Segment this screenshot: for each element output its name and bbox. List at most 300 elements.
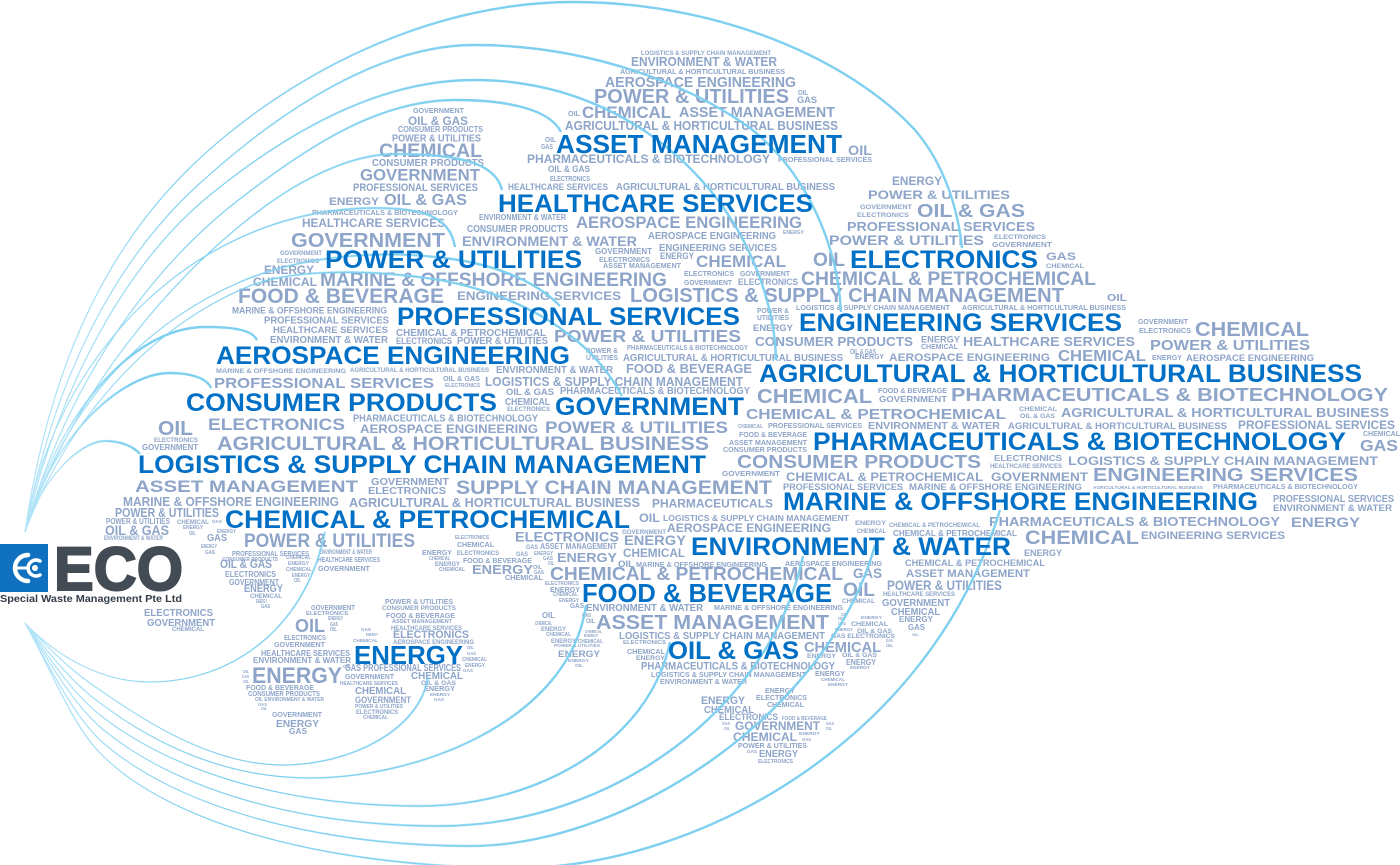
word map: grey industry terms, central band: OIL (912, 632, 920, 637)
curve to Professional Services (25, 255, 560, 532)
word map: grey industry terms, southern island: GAS (747, 749, 757, 754)
word map: grey industry terms, eastern landmass: MARINE & OFFSHORE ENGINEERING (909, 482, 1082, 492)
word map: grey industry terms, central band: POWER & UTILITIES (554, 643, 600, 648)
word map: grey industry terms, southern landmass left: GOVERNMENT (311, 605, 356, 612)
word map: grey industry terms, eastern landmass: GOVERNMENT (879, 394, 948, 404)
word map: grey industry terms, north-west landmass: CHEMICAL (286, 555, 311, 561)
word map: grey industry terms, central band: ASSET MANAGEMENT (540, 542, 617, 551)
word map: grey industry terms, eastern landmass: AGRICULTURAL & HORTICULTURAL BUSINESS (1008, 421, 1227, 432)
word map: grey industry terms, north-west landmass: ELECTRONICS (154, 437, 199, 444)
word map: grey industry terms, central band: OIL (841, 612, 847, 617)
word map: grey industry terms, eastern landmass: CHEMICAL (757, 386, 872, 408)
word map: grey industry terms, north-west landmass: MARINE & OFFSHORE ENGINEERING (232, 306, 387, 316)
word map: grey industry terms, central band: CHEMICAL (439, 567, 465, 573)
word map: grey industry terms, central band (422, 511, 1046, 687)
word map: grey industry terms, eastern landmass: CONSUMER PRODUCTS (737, 452, 981, 472)
word map: grey industry terms, north-west landmass: GOVERNMENT (291, 230, 445, 252)
word map: grey industry terms, southern island: ENERGY (765, 686, 795, 695)
word map: grey industry terms, southern island: ENERGY (701, 695, 746, 707)
word map: grey industry terms, top landmass: CHEMICAL & PETROCHEMICAL (801, 269, 1096, 290)
word map: grey industry terms, north-west landmass: CHEMICAL (177, 519, 209, 526)
word map: grey industry terms, eastern landmass: ENERGY (753, 323, 793, 333)
word map: grey industry terms, top landmass: LOGISTICS & SUPPLY CHAIN MANAGEMENT (630, 285, 1064, 307)
word map: blue highlighted industries (138, 129, 1362, 670)
word map: grey industry terms, north-west landmass: ENERGY (244, 583, 284, 595)
word map: grey industry terms, top landmass: CHEMICAL (696, 252, 786, 271)
word map: grey industry terms, eastern landmass: CHEMICAL (921, 344, 959, 351)
word map: grey industry terms, north-west landmass: GOVERNMENT (147, 617, 216, 629)
word map: grey industry terms, eastern landmass: POWER & UTILITIES (868, 188, 1010, 202)
word map: grey industry terms, top landmass: OIL (798, 90, 809, 97)
word map: grey industry terms, southern island: GAS (722, 721, 730, 726)
word map: grey industry terms, central band: CHEMICAL (535, 621, 552, 627)
word map: grey industry terms, central band: OIL (542, 611, 555, 620)
word map: grey industry terms, central band: ENERGY (435, 562, 460, 568)
heading: Electronics: ELECTRONICS (850, 246, 1038, 274)
logo: ECO Special Waste Management Pte Ltd (0, 535, 183, 605)
word map: grey industry terms, southern island: OIL (826, 726, 832, 731)
word map: grey industry terms, central band: MARINE & OFFSHORE ENGINEERING (636, 560, 767, 569)
word map: grey industry terms, top landmass: PROFESSIONAL SERVICES (778, 155, 872, 164)
word map: grey industry terms, eastern landmass: PROFESSIONAL SERVICES (1238, 420, 1395, 432)
word map: grey industry terms, eastern landmass: PROFESSIONAL SERVICES (783, 482, 903, 493)
word map: grey industry terms, central band: OIL (886, 643, 893, 648)
word map: grey industry terms, north-west landmass: ENERGY (201, 544, 217, 550)
word map: grey industry terms, north-west landmass: ENVIRONMENT & WATER (104, 536, 164, 542)
word map: grey industry terms, top landmass: ENVIRONMENT & WATER (462, 233, 637, 249)
word map: grey industry terms, north-west landmass: GAS (261, 604, 271, 610)
word map: grey industry terms, top landmass (320, 50, 1096, 307)
word map: grey industry terms, north-west landmass: CHEMICAL & PETROCHEMICAL (396, 328, 546, 339)
heading: Government: GOVERNMENT (555, 393, 744, 421)
word map: grey industry terms, southern landmass left: ELECTRONICS (356, 709, 399, 716)
word map: grey industry terms, southern island: OIL (724, 726, 730, 731)
word map: grey industry terms, top landmass: ENVIRONMENT & WATER (631, 55, 777, 69)
word map: grey industry terms, central band: ELECTRONICS (457, 550, 500, 557)
word map: grey industry terms, central band: ENERGY (541, 627, 566, 633)
word map: grey industry terms, southern landmass left: OIL (261, 706, 267, 711)
word map: grey industry terms, eastern landmass: PHARMACEUTICALS & BIOTECHNOLOGY (989, 514, 1280, 529)
word map: grey industry terms, top landmass: ENVIRONMENT & WATER (479, 213, 566, 222)
word map: grey industry terms, north-west landmass: ELECTRONICS (277, 258, 320, 265)
word map: grey industry terms, eastern landmass: GOVERNMENT (1138, 319, 1189, 326)
word map: grey industry terms, top landmass: ENGINEERING SERVICES (659, 243, 777, 254)
word map: grey industry terms, central band: ENERGY (807, 654, 836, 660)
word map: grey industry terms, north-west landmass: AEROSPACE ENGINEERING (360, 424, 538, 436)
word map: grey industry terms, southern landmass left: GOVERNMENT (272, 712, 323, 719)
word map: grey industry terms, central band: GAS (534, 570, 545, 576)
heading: Logistics and Supply Chain Management: LOGISTICS & SUPPLY CHAIN MANAGEMENT (138, 451, 706, 479)
word map: grey industry terms, top landmass: GOVERNMENT (740, 269, 790, 278)
word map: grey industry terms, southern landmass left: GOVERNMENT (345, 672, 394, 681)
word map: grey industry terms, central band: ELECTRONICS (623, 640, 666, 646)
word map: grey industry terms, eastern landmass (722, 174, 1400, 559)
word map: grey industry terms, top landmass: OIL (848, 142, 872, 158)
word map: grey industry terms, southern landmass left: ENERGY (328, 616, 343, 622)
word map: grey industry terms, southern landmass left: GAS PROFESSIONAL SERVICES (345, 663, 461, 674)
word map: grey industry terms, north-west landmass: OIL & GAS (506, 387, 554, 397)
word map: grey industry terms, central band: OIL (548, 561, 554, 567)
word map: grey industry terms, central band: ELECTRONICS (545, 581, 579, 587)
word map: grey industry terms, north-west landmass: ENVIRONMENT & WATER (270, 335, 389, 346)
word map: grey industry terms, top landmass: AEROSPACE ENGINEERING (605, 75, 796, 91)
word map: grey industry terms, eastern landmass: GOVERNMENT (991, 472, 1088, 484)
word map: grey industry terms, central band: OIL (618, 559, 635, 569)
word map: grey industry terms, north-west landmass: ENVIRONMENT & WATER (319, 549, 372, 556)
word map: grey industry terms, north-west landmass: CHEMICAL (253, 275, 317, 289)
word map: grey industry terms, central band: ENERGY (534, 551, 554, 557)
word map: grey industry terms, central band: ENERGY (550, 587, 580, 594)
word map: grey industry terms, central band: GOVERNMENT (622, 529, 666, 536)
word map: grey industry terms, central band: CHEMICAL (429, 556, 450, 562)
word map: grey industry terms, central band: ENERGY (861, 615, 882, 620)
word map: grey industry terms, eastern landmass: CHEMICAL (1195, 319, 1309, 341)
word map: grey industry terms, central band: ASSET MANAGEMENT (596, 612, 829, 634)
heading: Aerospace Engineering: AEROSPACE ENGINEERING (216, 342, 570, 370)
word map: grey industry terms, top landmass: AGRICULTURAL & HORTICULTURAL BUSINESS (565, 119, 838, 133)
word map: grey industry terms, southern landmass left: GAS (463, 668, 473, 673)
word map: grey industry terms, north-west landmass: HEALTHCARE SERVICES (273, 325, 388, 336)
word map: grey industry terms, central band: CHEMICAL (804, 639, 881, 656)
word map: grey industry terms, top landmass: AGRICULTURAL & HORTICULTURAL BUSINESS (620, 67, 785, 76)
word map: grey industry terms, north-west landmass: GOVERNMENT (142, 443, 198, 452)
word map: grey industry terms, eastern landmass: FOOD & BEVERAGE (878, 386, 947, 395)
word map: grey industry terms, north-west landmass: POWER & UTILITIES (106, 517, 171, 526)
word map: grey industry terms, north-west landmass: CONSUMER PRODUCTS (222, 557, 278, 563)
word map: grey industry terms, north-west landmass: OIL (158, 418, 193, 440)
word map: grey industry terms, north-west landmass: ENERGY (264, 263, 314, 277)
word map: grey industry terms, north-west landmass: FOOD & BEVERAGE (626, 362, 752, 376)
word map: grey industry terms, north-west landmass: POWER & UTILITIES (244, 531, 415, 552)
word map: grey industry terms, north-west landmass: ENERGY (329, 196, 380, 208)
word map: grey industry terms, eastern landmass: ENERGY (1024, 548, 1063, 559)
word map: grey industry terms, north-west landmass: PROFESSIONAL SERVICES (264, 316, 389, 326)
heading: Chemical and Petrochemical: CHEMICAL & PETROCHEMICAL (225, 506, 630, 534)
curve to Environment and Water right (25, 545, 875, 846)
word map: grey industry terms, eastern landmass: CHEMICAL (1025, 528, 1139, 549)
heading: Agricultural and Horticultural Business: AGRICULTURAL & HORTICULTURAL BUSINESS (759, 360, 1362, 388)
curve to Government (25, 272, 622, 532)
word map: grey industry terms, north-west landmass: ENERGY (292, 573, 311, 579)
word map: grey industry terms, north-west landmass: HEALTHCARE SERVICES (302, 216, 445, 230)
word map: grey industry terms, eastern landmass: CONSUMER PRODUCTS (723, 447, 807, 454)
word map: grey industry terms, southern landmass left: OIL ENVIRONMENT & WATER (255, 697, 324, 703)
word map: grey industry terms, north-west landmass: OIL (189, 531, 196, 537)
word map: grey industry terms, north-west landmass: ELECTRONICS (144, 608, 213, 619)
word map: grey industry terms, eastern landmass: ENERGY (1291, 514, 1361, 530)
word map: grey industry terms, central band: ENERGY (846, 658, 877, 667)
word map: grey industry terms, southern island: ELECTRONICS (758, 759, 794, 765)
word map: grey industry terms, central band: CHEMICAL (546, 632, 571, 638)
word map: grey industry terms, eastern landmass: CONSUMER PRODUCTS (755, 335, 913, 349)
word map: grey industry terms, eastern landmass: CHEMICAL (1046, 263, 1084, 270)
heading: Energy: ENERGY (354, 640, 463, 670)
word map: grey industry terms, north-west landmass: OIL & GAS (384, 192, 467, 209)
word map: grey industry terms, southern landmass left: GAS (258, 702, 267, 707)
word map: grey industry terms, north-west landmass: POWER & UTILITIES (457, 336, 548, 347)
word map: grey industry terms, central band: ENERGY (828, 682, 848, 687)
word map: grey industry terms, north-west landmass: CHEMICAL (286, 567, 312, 573)
word map: grey industry terms, southern landmass left: OIL (330, 627, 337, 633)
word map: grey industry terms, eastern landmass: ENGINEERING SERVICES (1141, 530, 1285, 542)
curve to Marine and Offshore Engineering (25, 510, 1000, 865)
word map: grey industry terms, eastern landmass: CHEMICAL (1019, 406, 1057, 413)
word map: grey industry terms, southern landmass left: POWER & UTILITIES (355, 704, 403, 710)
word map: grey industry terms, north-west landmass: GOVERNMENT (360, 166, 481, 184)
word map: grey industry terms, north-west landmass: GOVERNMENT (229, 578, 279, 587)
word map: grey industry terms, central band: ENERGY (850, 665, 870, 670)
word map: grey industry terms, eastern landmass: GOVERNMENT (860, 204, 912, 211)
word map: grey industry terms, north-west landmass: PROFESSIONAL SERVICES (232, 551, 309, 558)
word map: grey industry terms, southern island: ELECTRONICS (756, 695, 807, 702)
curve to Electronics (25, 2, 962, 532)
word map: grey industry terms, central band: ENVIRONMENT & WATER (660, 677, 748, 686)
word map: grey industry terms, eastern landmass: AGRICULTURAL & HORTICULTURAL BUSINESS (962, 305, 1126, 312)
word map: grey industry terms, central band: ENERGY (559, 598, 580, 604)
word map: grey industry terms, central band: ENERGY (568, 658, 589, 663)
word map: grey industry terms, north-west landmass: POWER & UTILITIES (554, 326, 741, 346)
word map: grey industry terms, central band: OIL (533, 565, 542, 571)
word map: grey industry terms, north-west landmass: ENERGY (288, 561, 310, 567)
curve to Power and Utilities (25, 208, 455, 532)
word map: grey industry terms, north-west landmass: OIL & GAS (220, 557, 272, 571)
word map: grey industry terms, central band: HEALTHCARE SERVICES (883, 592, 955, 598)
curve to Logistics (25, 441, 140, 532)
word map: grey industry terms, southern landmass left: OIL (295, 616, 325, 636)
word map: grey industry terms, top landmass: AEROSPACE ENGINEERING (648, 231, 776, 242)
word map: grey industry terms, central band: GAS (853, 565, 882, 581)
word map: grey industry terms, north-west landmass: ELECTRONICS (396, 336, 452, 346)
word map: grey industry terms, eastern landmass: HEALTHCARE SERVICES (990, 464, 1062, 470)
word map: grey industry terms, eastern landmass: ELECTRONICS (1139, 328, 1191, 335)
word map: grey industry terms, eastern landmass: ENERGY (855, 521, 886, 527)
word map: grey industry terms, north-west landmass: ELECTRONICS (225, 570, 277, 579)
word map: grey industry terms, southern landmass left: ELECTRONICS (284, 635, 326, 642)
word map: grey industry terms, north-west landmass: ELECTRONICS (507, 406, 551, 413)
word map: grey industry terms, central band: GAS (543, 556, 554, 562)
heading: Oil and Gas: OIL & GAS (668, 637, 799, 665)
word map: grey industry terms, north-west landmass: CHEMICAL (379, 141, 482, 162)
word map: grey industry terms, north-west landmass: ASSET MANAGEMENT (135, 477, 359, 496)
word map: grey industry terms, central band: CHEMICAL & PETROCHEMICAL (550, 564, 843, 584)
word map: grey industry terms, north-west landmass: PROFESSIONAL SERVICES (353, 182, 478, 194)
word map: grey industry terms, north-west landmass (104, 108, 843, 633)
word map: grey industry terms, north-west landmass: AGRICULTURAL & HORTICULTURAL BUSINESS (623, 352, 843, 364)
word map: grey industry terms, southern island: GAS (802, 737, 811, 742)
word map: grey industry terms, central band: ENERGY (636, 655, 666, 662)
word map: grey industry terms, central band: OIL & GAS (842, 652, 878, 659)
word map: grey industry terms, southern island: POWER & UTILITIES (738, 741, 807, 750)
word map: grey industry terms, north-west landmass: POWER & UTILITIES (545, 418, 728, 437)
word map: grey industry terms, southern landmass left: CHEMICAL (355, 686, 406, 697)
word map: grey industry terms, eastern landmass: ELECTRONICS (994, 453, 1062, 463)
word map: grey industry terms, top landmass: LOGISTICS & SUPPLY CHAIN MANAGEMENT (641, 50, 771, 57)
word map: grey industry terms, eastern landmass: ENERGY (892, 174, 942, 188)
word map: grey industry terms, central band: GAS ELECTRONICS (831, 633, 896, 640)
word map: grey industry terms, southern landmass left: AEROSPACE ENGINEERING (393, 639, 474, 646)
word map: grey industry terms, north-west landmass: POWER & UTILITIES (392, 134, 481, 144)
word map: grey industry terms, southern landmass left: ELECTRONICS (306, 611, 348, 617)
word map: grey industry terms, central band: MARINE & OFFSHORE ENGINEERING (714, 603, 843, 612)
word map: grey industry terms, north-west landmass: GOVERNMENT (318, 564, 370, 573)
word map: grey industry terms, north-west landmass: PROFESSIONAL SERVICES (214, 375, 434, 392)
word map: grey industry terms, eastern landmass: CHEMICAL (738, 424, 763, 430)
word map: grey industry terms, eastern landmass: AGRICULTURAL & HORTICULTURAL BUSINESS (1061, 405, 1389, 420)
word map: grey industry terms, central band: LOGISTICS & SUPPLY CHAIN MANAGEMENT (663, 514, 849, 523)
word map: grey industry terms, central band: LOGISTICS & SUPPLY CHAIN MANAGEMENT (651, 670, 806, 679)
word map: grey industry terms, top landmass: GAS (797, 95, 817, 105)
icon: blue square with EC swirl (0, 544, 48, 592)
word map: grey industry terms, central band: ENERGY (422, 550, 452, 557)
word map: grey industry terms, central band: CHEMICAL (585, 629, 602, 634)
word map: grey industry terms, eastern landmass: PHARMACEUTICALS & BIOTECHNOLOGY (951, 385, 1388, 405)
word map: grey industry terms, southern island: GAS (826, 721, 834, 726)
word map: grey industry terms, central band: CHEMICAL (623, 546, 685, 560)
word map: grey industry terms, eastern landmass: CHEMICAL (857, 529, 886, 535)
heading: Power and Utilities: POWER & UTILITIES (325, 246, 582, 274)
word map: grey industry terms, central band: OIL (639, 511, 660, 525)
word map: grey industry terms, central band: LOGISTICS & SUPPLY CHAIN MANAGEMENT (619, 630, 826, 642)
word map: grey industry terms, north-west landmass: PHARMACEUTICALS & BIOTECHNOLOGY (353, 414, 538, 424)
word map: grey industry terms, eastern landmass: FOOD & BEVERAGE (739, 430, 807, 439)
heading: Asset Management: ASSET MANAGEMENT (556, 129, 842, 159)
word map: grey industry terms, top landmass: ELECTRONICS (684, 269, 734, 278)
word map: grey industry terms, southern landmass left: POWER & UTILITIES (385, 597, 453, 606)
curve to Energy (25, 623, 428, 765)
word map: grey industry terms, north-west landmass: POWER & UTILITIES (115, 506, 219, 520)
word map: grey industry terms, central band: ENERGY (584, 633, 598, 638)
word map: grey industry terms, central band: ENERGY (815, 669, 845, 678)
word map: grey industry terms, southern landmass left: OIL (343, 664, 351, 669)
word map: grey industry terms, top landmass: ENGINEERING SERVICES (457, 289, 621, 303)
word map: grey industry terms, central band: CHEMICAL & PETROCHEMICAL (905, 558, 1046, 568)
word map: grey industry terms, central band: ENERGY (558, 649, 600, 659)
word map: grey industry terms, central band: ELECTRONICS (455, 535, 490, 541)
heading: Food and Beverage: FOOD & BEVERAGE (582, 578, 832, 608)
word map: grey industry terms, top landmass: HEALTHCARE SERVICES (508, 182, 608, 192)
curve to Food and Beverage (25, 605, 586, 778)
word map: grey industry terms, central band: AEROSPACE ENGINEERING (785, 561, 883, 568)
word map: grey industry terms, southern landmass left: HEALTHCARE SERVICES (340, 681, 399, 687)
word map: grey industry terms, north-west landmass: MARINE & OFFSHORE ENGINEERING (123, 495, 339, 509)
word map: grey industry terms, central band: OIL (575, 663, 583, 668)
curve to Aerospace Engineering (25, 327, 257, 532)
word map: grey industry terms, eastern landmass: AGRICULTURAL & HORTICULTURAL BUSINESS (1093, 485, 1203, 490)
word map: grey industry terms, southern landmass left: GAS (434, 697, 444, 702)
word map: grey industry terms, eastern landmass: POWER & (757, 308, 789, 315)
heading: Consumer Products: CONSUMER PRODUCTS (186, 389, 497, 417)
word map: grey industry terms, central band: OIL (838, 616, 845, 621)
word map: grey industry terms, southern landmass left: GAS (330, 622, 338, 628)
word map: grey industry terms, north-west landmass: ENVIRONMENT & WATER (496, 365, 614, 376)
word map: grey industry terms, southern landmass left: FOOD & BEVERAGE (246, 683, 314, 692)
word map: grey industry terms, north-west landmass: PHARMACEUTICALS (652, 496, 773, 510)
word map: grey industry terms, north-west landmass: OIL & GAS (408, 114, 468, 128)
word map: grey industry terms, southern island: ELECTRONICS (719, 712, 778, 722)
word map: grey industry terms, north-west landmass: ELECTRONICS (368, 486, 446, 497)
curve to Healthcare Services (25, 154, 502, 532)
word map: grey industry terms, north-west landmass: CHEMICAL (505, 397, 550, 408)
heading: Engineering Services: ENGINEERING SERVICES (799, 309, 1122, 337)
word map: grey industry terms, southern landmass left: OIL & GAS (421, 680, 457, 687)
word map: grey industry terms, north-west landmass: GOVERNMENT (413, 108, 465, 115)
word map: grey industry terms, southern landmass left: HEALTHCARE SERVICES (391, 625, 463, 632)
word map: grey industry terms, north-west landmass: GOVERNMENT (371, 477, 449, 488)
word map: grey industry terms, eastern landmass: PHARMACEUTICALS & BIOTECHNOLOGY (1213, 484, 1358, 491)
word map: grey industry terms, central band: ELECTRONICS (515, 528, 619, 544)
word map: grey industry terms, central band: ENERGY (472, 562, 533, 577)
word map: grey industry terms, southern island: ENERGY (759, 749, 798, 760)
word map: grey industry terms, eastern landmass: AEROSPACE ENGINEERING (889, 352, 1050, 364)
word map: grey industry terms, north-west landmass: ENERGY (217, 529, 237, 535)
word map: grey industry terms, top landmass: PHARMACEUTICALS & BIOTECHNOLOGY (527, 152, 770, 166)
word map: grey industry terms, north-west landmass: ELECTRONICS (445, 383, 480, 389)
word map: grey industry terms, north-west landmass: CHEMICAL (172, 627, 204, 633)
word map: grey industry terms, eastern landmass: OIL & GAS (850, 349, 876, 356)
word map: grey industry terms, north-west landmass: CONSUMER PRODUCTS (398, 125, 484, 134)
word map: grey industry terms, north-west landmass: GAS (212, 519, 222, 524)
word map: grey industry terms, southern landmass left: ENERGY (252, 663, 342, 688)
word map: grey industry terms, north-west landmass: LOGISTICS & SUPPLY CHAIN MANAGEMENT (485, 374, 743, 389)
word map: grey industry terms, eastern landmass: OIL & GAS (917, 201, 1025, 221)
word map: grey industry terms, north-west landmass: PHARMACEUTICALS & BIOTECHNOLOGY (560, 386, 750, 397)
word map: grey industry terms, central band: CHEMICAL (851, 621, 888, 628)
word map: grey industry terms, top landmass: GOVERNMENT (595, 246, 653, 256)
word map: grey industry terms, southern landmass left: ENERGY (465, 663, 486, 669)
word map: grey industry terms, southern landmass left: CONSUMER PRODUCTS (248, 691, 320, 698)
word map: grey industry terms, north-west landmass: PHARMACEUTICALS & BIOTECHNOLOGY (312, 208, 458, 217)
word map: grey industry terms, eastern landmass: ELECTRONICS (994, 234, 1047, 241)
connector curves from the ECO logo to each industry (25, 2, 1000, 865)
word map: grey industry terms, north-west landmass: GAS (205, 550, 216, 556)
word map: grey industry terms, southern island: CHEMICAL (704, 705, 754, 716)
word map: grey industry terms, southern landmass left: ELECTRONICS (393, 629, 469, 641)
word map: grey industry terms, central band: GAS (526, 544, 539, 551)
word map: grey industry terms, southern landmass left: GOVERNMENT (274, 640, 325, 649)
word map: grey industry terms, central band: GOVERNMENT (882, 598, 950, 609)
word map: grey industry terms, central band: CHEMICAL (891, 607, 940, 618)
word map: grey industry terms, central band: CHEMICAL (842, 599, 875, 605)
word map: grey industry terms, top landmass: CHEMICAL (582, 103, 671, 122)
word map: grey industry terms, central band: CHEMICAL (553, 592, 578, 598)
word map: grey industry terms, top landmass: ASSET MANAGEMENT (603, 261, 681, 270)
curve to Asset Management (25, 100, 561, 532)
word map: grey industry terms, central band: CHEMICAL (627, 647, 665, 656)
word map: grey industry terms, top landmass: GAS (541, 144, 553, 151)
word map: grey industry terms, eastern landmass: ENERGY (855, 354, 884, 361)
word map: grey industry terms, southern landmass left: HEALTHCARE SERVICES (261, 648, 350, 658)
word map: grey industry terms, central band: GAS (516, 551, 529, 558)
word map: grey industry terms, eastern landmass: OIL & GAS (1020, 413, 1056, 420)
word map: grey industry terms, eastern landmass: PROFESSIONAL SERVICES (768, 423, 862, 430)
word map: grey industry terms, north-west landmass: UTILITIES (586, 355, 618, 362)
word map: grey industry terms, eastern landmass: GOVERNMENT (722, 469, 780, 478)
word map: grey industry terms, central band: ENERGY (624, 533, 686, 548)
word map: grey industry terms, eastern landmass: ENVIRONMENT & WATER (868, 421, 1001, 432)
heading: Pharmaceuticals and Biotechnology: PHARMACEUTICALS & BIOTECHNOLOGY (813, 428, 1346, 456)
word map: grey industry terms, eastern landmass: CHEMICAL (1363, 431, 1400, 438)
word map: grey industry terms, north-west landmass: ENERGY (256, 599, 267, 605)
word map: grey industry terms, top landmass: MARINE & OFFSHORE ENGINEERING (320, 270, 667, 291)
word map: grey industry terms, southern landmass left: ENERGY (366, 632, 378, 637)
word map: grey industry terms, north-west landmass: SUPPLY CHAIN MANAGEMENT (456, 478, 772, 499)
heading: Marine and Offshore Engineering: MARINE & OFFSHORE ENGINEERING (783, 488, 1258, 516)
word map: grey industry terms, eastern landmass: UTILITIES (757, 315, 789, 322)
word map: grey industry terms, central band: GAS (886, 638, 893, 643)
word map: grey industry terms, southern landmass left: ASSET MANAGEMENT (392, 619, 453, 625)
curve to Consumer Products (25, 373, 211, 532)
word map: grey industry terms, southern island: FOOD & BEVERAGE (782, 716, 828, 722)
